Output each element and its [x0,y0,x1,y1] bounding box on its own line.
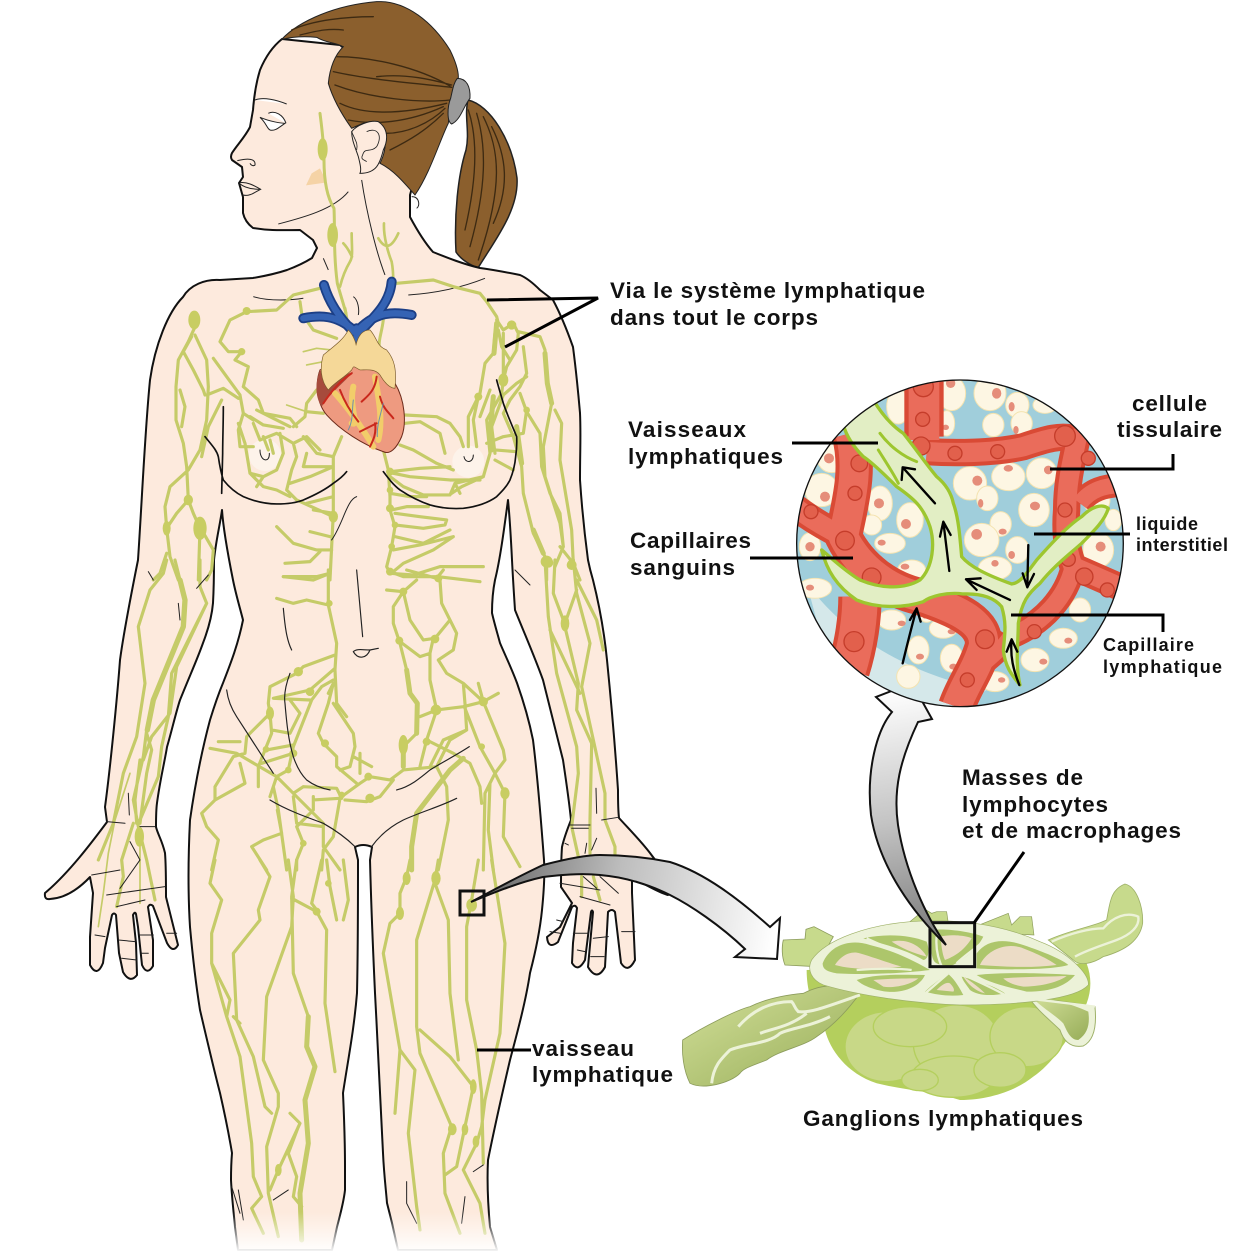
germinal centers [835,935,1067,993]
lobules [845,1005,1063,1097]
label: liquide interstitiel: interstitiel [1136,535,1228,555]
tube left [682,986,860,1086]
label: capillaire lymphatique: Capillaire [1103,635,1194,655]
body silhouette [45,39,671,1250]
nose and mouth [237,159,261,195]
tube left valves [712,995,860,1083]
label: vaisseau lymphatique: lymphatique [532,1062,673,1087]
flow arrows [902,467,1034,685]
top stubs [910,909,1034,935]
label: vaisseau lymphatique: vaisseau [532,1036,634,1061]
leg vessels [210,860,505,1240]
lymph node [682,884,1143,1100]
eyebrow and eye [255,99,287,130]
label: cellule tissulaire: cellule [1132,391,1207,416]
label: ganglions lymphatiques: Ganglions lymphatiques [803,1106,1083,1131]
nodes [543,558,577,631]
lymph vessels network [92,280,635,1240]
label: vaisseaux lymphatiques [628,417,783,469]
nodes [275,871,479,1176]
tube lower right lumen [1032,997,1089,1040]
thick vessels of the pelvis [403,670,463,870]
neck lymph vessels [320,113,398,347]
label: masses de lymphocytes et de macrophages: Masses de [962,765,1083,790]
thick calf vessel [300,1017,315,1240]
vessels [383,280,580,580]
cortex [823,930,1075,996]
neck node [327,223,338,247]
figure: human body [45,2,671,1253]
pale lower band [810,598,986,706]
jaw, neck lines [253,180,485,315]
hair elastic [448,78,470,124]
label: vaisseaux lymphatiques: Vaisseaux [628,417,746,442]
label: cellule tissulaire [1117,391,1222,442]
hair strands [292,17,504,260]
knee creases [232,1165,483,1223]
vessels [153,288,342,580]
line: via le système lymphatique [487,298,598,347]
label: masses de lymphocytes et de macrophages: et de macrophages [962,818,1181,843]
line: capillaire lymphatique [1011,615,1163,632]
vessels [202,570,520,870]
top left stubs [782,927,833,967]
ear [352,121,387,173]
wrist node [135,827,144,847]
nodes [386,320,576,576]
fine vessels near heart [287,348,332,412]
left areola [249,439,281,471]
leg bottom fade [200,1212,520,1253]
line: masses de lymphocytes [974,852,1024,923]
circle outline [797,380,1123,707]
circle background [797,380,1123,707]
hair, ear and face [237,2,504,347]
square on the node [930,923,975,967]
right areola [452,446,484,478]
label: capillaires sanguins: Capillaires [630,528,751,553]
label: vaisseau lymphatique [532,1036,673,1087]
line: liquide interstitiel [1034,532,1130,536]
thick vessels along the arm [491,323,552,553]
blue veins [303,282,412,343]
abdomen lines and navel [227,570,469,847]
label: capillaire lymphatique [1103,635,1222,677]
right forearm and hand [515,558,635,957]
heart muscle [317,365,404,452]
vessels [210,860,505,1237]
ponytail [455,100,517,268]
nodes [263,574,510,847]
lymphatic capillary [822,400,1108,685]
hand creases [515,570,635,957]
facial gland [306,168,325,185]
tube lower right [1028,997,1096,1046]
body contour lines [205,380,517,847]
tube right valves [1052,915,1138,957]
line: cellule tissulaire [1050,454,1173,469]
lymphatic valves [878,433,917,483]
salivary node [318,138,328,161]
blood capillaries [790,367,1127,707]
fat over atria [321,330,396,390]
tissue cells [798,376,1122,692]
heart with great vessels [303,282,412,452]
label: via le système lymphatique [610,278,925,330]
label: liquide interstitiel [1136,514,1228,555]
cell nuclei [805,379,1106,683]
lower lobes body [807,963,1090,1100]
left chest and upper arm vessels [153,288,342,580]
callout pointer lines [487,298,1173,923]
square on the thigh [460,891,484,915]
label: capillaires sanguins [630,528,751,580]
magnified tissue circle [790,367,1127,713]
red blood cells [804,377,1114,687]
main forearm vessel [147,580,185,730]
vessels [98,560,207,907]
right breast and armpit [383,380,517,509]
fine hand vessels [98,773,140,927]
cut face capsule [810,921,1088,1005]
label: via le système lymphatique: dans tout le corps [610,305,818,330]
arrow: lymph node to magnified tissue [870,683,946,945]
hand creases [92,572,208,960]
label: masses de lymphocytes et de macrophages [962,765,1181,843]
arrow: thigh to lymph node [471,855,780,959]
nodes [163,307,338,540]
tube right [1048,884,1143,964]
pointer line: vaisseau lymphatique [477,1048,531,1052]
label: capillaire lymphatique: lymphatique [1103,657,1222,677]
label: via le système lymphatique: Via le système lymphatique [610,278,925,303]
left forearm and hand [92,560,208,960]
label: capillaires sanguins: sanguins [630,555,735,580]
label: masses de lymphocytes et de macrophages: lymphocytes [962,792,1108,817]
label: liquide interstitiel: liquide [1136,514,1198,534]
left breast and armpit [205,407,357,540]
abdomen and pelvis vessels [202,570,520,870]
label: vaisseaux lymphatiques: lymphatiques [628,444,783,469]
dark left side of heart [316,370,353,407]
hair [282,2,458,195]
label: cellule tissulaire: tissulaire [1117,417,1222,442]
vessels [545,560,615,900]
line: vaisseaux lymphatiques [792,442,878,444]
trabeculae [857,937,1095,1007]
right chest and upper arm vessels [383,280,580,580]
ear detail [352,130,379,162]
line: capillaires sanguins [750,556,853,560]
coronary vessels [323,373,393,447]
